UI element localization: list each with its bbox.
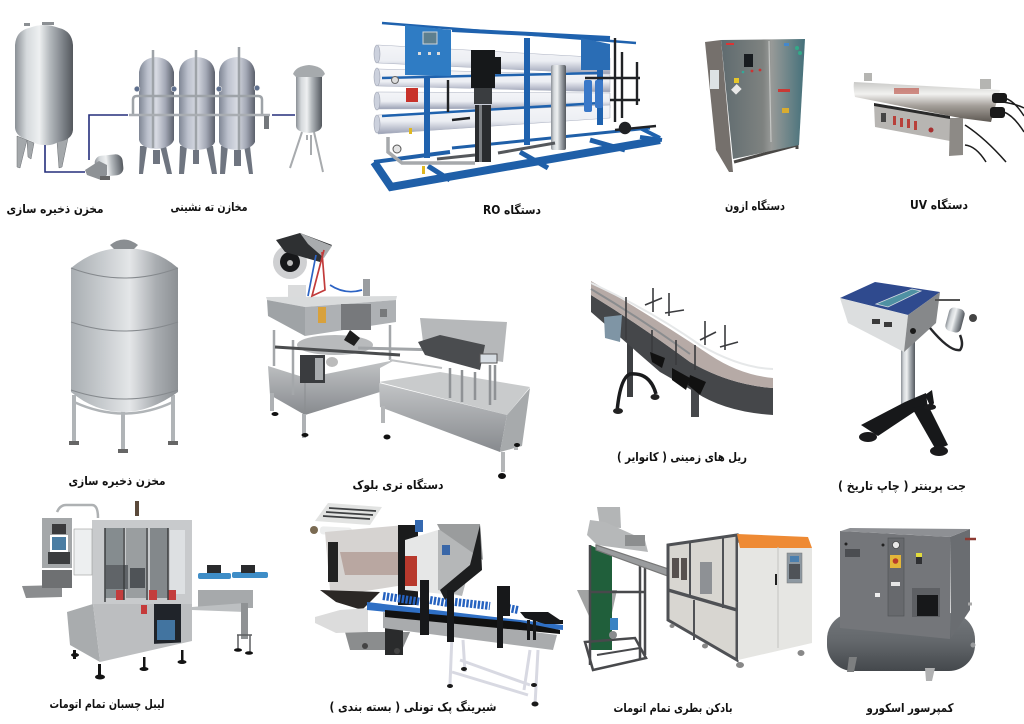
icon: logo and fittings xyxy=(844,539,976,648)
icon: dark frame xyxy=(585,545,646,670)
panel: shrink wrap tunnel xyxy=(310,503,563,706)
icon: outfeed rail xyxy=(22,505,98,598)
icon: columns and carousel xyxy=(274,325,400,395)
icon: compressor front xyxy=(840,531,950,639)
icon: UV ports xyxy=(864,73,991,89)
icon: filter body xyxy=(296,76,322,133)
panel: conveyor xyxy=(591,281,773,417)
icon: right table xyxy=(379,372,530,479)
icon: conveyor side xyxy=(591,295,773,415)
icon: conveyor stand left xyxy=(613,335,660,414)
icon: machine left side xyxy=(668,535,737,660)
icon: blue motor xyxy=(609,618,618,639)
panel: connecting pipework and pump xyxy=(45,115,295,180)
icon: cabinet side xyxy=(705,40,733,172)
label: inkjet printer: جت پرینتر ( چاپ تاریخ ) xyxy=(838,479,966,493)
panel: labeling machine xyxy=(22,501,268,680)
icon: white stand xyxy=(450,635,538,705)
icon: infeed dark unit xyxy=(320,590,380,610)
icon: stand feet xyxy=(447,667,538,706)
panel: RO unit xyxy=(374,23,662,187)
icon: right support leg xyxy=(234,603,253,655)
icon: tank top fittings xyxy=(24,22,54,26)
panel: screw compressor xyxy=(827,528,976,681)
icon: small blue panel xyxy=(581,38,610,70)
icon: black guide posts xyxy=(420,580,563,648)
label: conveyor: ریل های زمینی ( کانوایر ) xyxy=(617,450,747,465)
icon: UV end caps xyxy=(990,93,1007,118)
icon: control panel xyxy=(42,518,72,568)
icon: upper table xyxy=(266,296,397,336)
icon: tray slats xyxy=(323,508,376,519)
icon: bottle transfer rail xyxy=(596,545,708,590)
icon: signal tower xyxy=(135,501,139,516)
icon: blue control panel xyxy=(405,25,451,76)
panel: triblock machine xyxy=(266,233,530,479)
label: top storage tank: مخزن ذخیره سازی xyxy=(6,202,104,216)
panel: top storage tank xyxy=(15,22,73,168)
icon: receiver tank xyxy=(827,613,975,671)
icon: compressor top xyxy=(841,528,970,537)
icon: filter lid xyxy=(293,65,325,77)
icon: cabinet front xyxy=(721,39,805,159)
icon: compressor body side xyxy=(950,529,970,638)
icon: drain valve xyxy=(264,116,269,129)
icon: tank hatch xyxy=(110,240,138,249)
icon: tank 2 xyxy=(179,57,215,150)
panel: bottle blow moulding machine xyxy=(577,507,812,670)
icon: white infeed tray xyxy=(315,608,368,633)
icon: tunnel xyxy=(405,520,483,600)
icon: blue filter housings xyxy=(584,80,603,112)
icon: bottle starwheel table xyxy=(192,565,268,612)
icon: indicator lamp xyxy=(916,553,922,564)
icon: tank body xyxy=(15,25,73,145)
icon: white membrane tubes xyxy=(374,45,610,134)
icon: blue pipes xyxy=(45,115,295,172)
icon: guide rails xyxy=(591,283,773,369)
icon: printer base xyxy=(859,390,948,456)
icon: UV logo xyxy=(894,88,919,94)
icon: machine feet xyxy=(670,624,804,668)
icon: tank feet xyxy=(847,657,935,681)
icon: base frame xyxy=(374,128,662,187)
icon: central black brackets xyxy=(650,352,706,395)
label: shrink wrap tunnel: شیرینگ پک تونلی ( بسته بندی ) xyxy=(330,700,496,715)
icon: left guard xyxy=(74,529,92,575)
icon: printer head and cable xyxy=(930,300,977,350)
icon: conveyor body xyxy=(367,602,563,650)
label: triblock: دستگاه تری بلوک xyxy=(352,478,444,493)
icon: clamps xyxy=(626,288,738,370)
icon: tank shell xyxy=(71,248,178,412)
icon: infeed block xyxy=(42,570,72,588)
icon: control strip xyxy=(888,538,904,616)
icon: hopper xyxy=(577,590,617,640)
icon: pump xyxy=(85,154,124,180)
icon: UV cables xyxy=(965,98,1024,162)
panel: cartridge filter xyxy=(290,65,325,172)
icon: lower cart xyxy=(345,625,410,655)
icon: capping head xyxy=(273,233,332,297)
icon: tank seams xyxy=(71,268,178,399)
panel: inkjet printer xyxy=(840,282,977,456)
icon: top canister xyxy=(363,279,370,296)
label: UV: دستگاه UV xyxy=(910,198,968,212)
icon: cabinet details xyxy=(710,41,802,142)
label: bottle blow moulding: بادکن بطری تمام اتومات xyxy=(614,701,732,716)
icon: conveyor stand right xyxy=(691,385,699,417)
panel: UV sterilizer xyxy=(854,73,1024,162)
label: RO: دستگاه RO xyxy=(483,203,541,217)
panel: sedimentation tanks xyxy=(129,47,270,174)
icon: cabinet legs xyxy=(717,141,797,170)
icon: vertical and horizontal valves xyxy=(129,47,270,150)
icon: silver top unit xyxy=(587,507,648,552)
icon: black valves and pipes xyxy=(437,38,656,159)
icon: blue rails and uprights xyxy=(382,23,660,158)
icon: tank legs xyxy=(139,146,253,174)
label: labeling machine: لیبل چسبان تمام اتومات xyxy=(50,697,164,712)
icon: tank 1 xyxy=(139,57,174,149)
icon: vent louvre xyxy=(912,588,940,617)
icon: legs xyxy=(17,136,68,168)
icon: tank 3 xyxy=(219,57,255,150)
icon: blue bottles xyxy=(383,596,518,610)
icon: steel pipes, gauges, red actuator xyxy=(388,76,475,174)
icon: door line and handle xyxy=(775,547,778,648)
icon: gauges xyxy=(134,85,260,92)
icon: UV tube xyxy=(854,82,1000,122)
label: sedimentation tanks: مخازن ته نشینی xyxy=(170,200,248,214)
icon: film roll xyxy=(310,526,352,536)
icon: machine feet xyxy=(71,650,186,680)
icon: hopper and touch panel xyxy=(418,318,507,405)
icon: green elevator xyxy=(590,545,612,650)
icon: main frame xyxy=(92,520,192,604)
icon: machine front xyxy=(738,543,812,660)
icon: small control box xyxy=(604,315,622,342)
icon: black pump xyxy=(471,50,501,162)
icon: control screen xyxy=(787,553,802,583)
icon: printer pole xyxy=(901,340,915,408)
icon: printer case xyxy=(840,282,940,352)
icon: lower table xyxy=(268,360,395,438)
icon: star wheel and feed conveyor xyxy=(344,330,470,368)
icon: filter legs xyxy=(290,132,323,172)
label: compressor: کمپرسور اسکورو xyxy=(866,701,954,716)
icon: film tray xyxy=(315,503,382,525)
icon: sealer body xyxy=(325,525,418,605)
label: large storage tank: مخزن ذخیره سازی xyxy=(68,474,166,488)
icon: tank legs and ring xyxy=(74,395,173,450)
icon: belt surface xyxy=(591,281,773,388)
icon: tank feet xyxy=(69,441,178,453)
icon: silver column xyxy=(551,65,566,150)
icon: base cabinet xyxy=(67,593,192,662)
icon: air hoses xyxy=(308,250,362,296)
panel: ozone generator xyxy=(705,39,805,172)
icon: control box xyxy=(874,103,963,156)
panel: large storage tank xyxy=(69,240,178,453)
label: ozone: دستگاه ازون xyxy=(725,199,785,214)
icon: orange top xyxy=(737,534,812,548)
